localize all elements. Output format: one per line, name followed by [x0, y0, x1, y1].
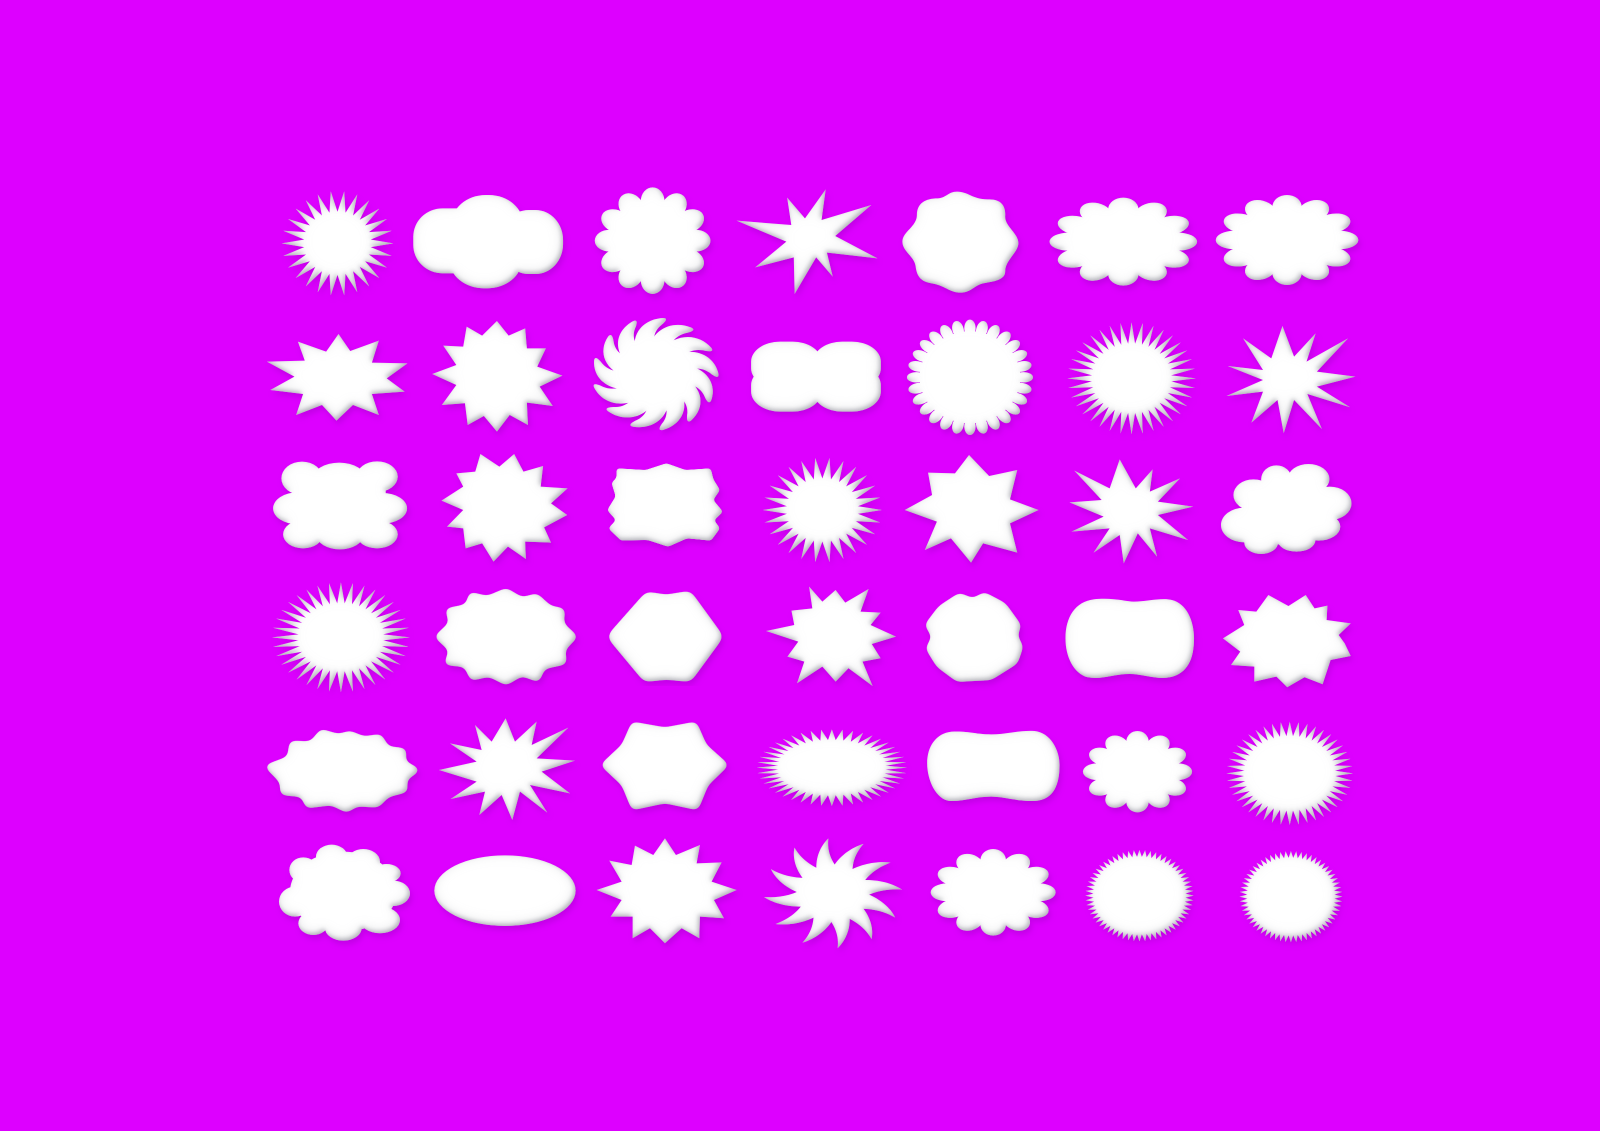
row 4, shape 5: soft lobed badge — [928, 595, 1020, 679]
row 5, shape 3: soft six-point star — [603, 724, 726, 808]
row 6, shape 2: plain oval — [434, 855, 576, 926]
row 4, shape 3: soft hexagon — [616, 599, 715, 674]
row 6, shape 3: twelve-point star — [597, 838, 737, 943]
row 1, shape 3: scalloped flower — [595, 187, 710, 294]
row 5, shape 5: rounded pillow — [927, 731, 1060, 801]
row 3, shape 7: irregular cloud — [1221, 464, 1352, 554]
row 4, shape 4: twelve-point star — [766, 587, 896, 686]
row 4, shape 2: soft wavy star — [437, 590, 575, 683]
row 2, shape 4: double-bulge cloud — [751, 342, 881, 412]
row 3, shape 2: twelve-point star — [441, 454, 568, 562]
row 5, shape 4: oval serrated burst — [756, 729, 908, 807]
row 4, shape 6: rounded pillow — [1065, 599, 1194, 678]
row 6, shape 6: fuzzy round burst — [1083, 848, 1196, 943]
row 5, shape 6: scalloped flower — [1083, 731, 1192, 812]
row 6, shape 7: fuzzy round burst — [1237, 849, 1345, 944]
row 2, shape 2: twelve-point star — [432, 321, 562, 432]
row 6, shape 1: fluffy cloud — [279, 845, 410, 941]
row 1, shape 4: eight-point star — [737, 189, 878, 294]
row 3, shape 6: eleven-point star — [1069, 459, 1193, 563]
row 6, shape 4: thin swirl star — [763, 838, 903, 949]
row 4, shape 7: twelve-point star — [1223, 595, 1351, 687]
row 5, shape 7: dense spiky burst — [1225, 721, 1354, 826]
row 2, shape 1: wide ten-point star — [267, 334, 407, 421]
row 6, shape 5: oval scalloped cloud — [931, 849, 1056, 936]
row 1, shape 2: three-lobed cloud — [413, 195, 563, 288]
row 5, shape 1: wide wavy cloud — [268, 732, 417, 810]
row 5, shape 2: twelve-point star — [439, 718, 575, 820]
row 1, shape 6: oval scalloped cloud — [1050, 198, 1197, 286]
row 1, shape 5: soft wavy badge — [902, 192, 1018, 293]
row 2, shape 3: swirl pinwheel — [591, 316, 721, 433]
row 3, shape 4: spiky burst — [762, 457, 883, 563]
row 2, shape 7: eleven-point star — [1227, 326, 1355, 433]
row 2, shape 5: round scalloped seal — [907, 320, 1033, 435]
row 3, shape 5: eight-point star — [905, 455, 1039, 563]
row 2, shape 6: fine spiky burst — [1067, 322, 1196, 435]
row 1, shape 7: oval scalloped cloud — [1216, 195, 1358, 285]
shape grid — [267, 187, 1358, 949]
row 4, shape 1: fine spiky burst — [271, 582, 410, 693]
row 3, shape 1: rectangular cloud — [273, 461, 407, 549]
row 1, shape 1: fine spiky burst — [281, 190, 394, 296]
row 3, shape 3: fringed rectangular badge — [609, 465, 721, 545]
